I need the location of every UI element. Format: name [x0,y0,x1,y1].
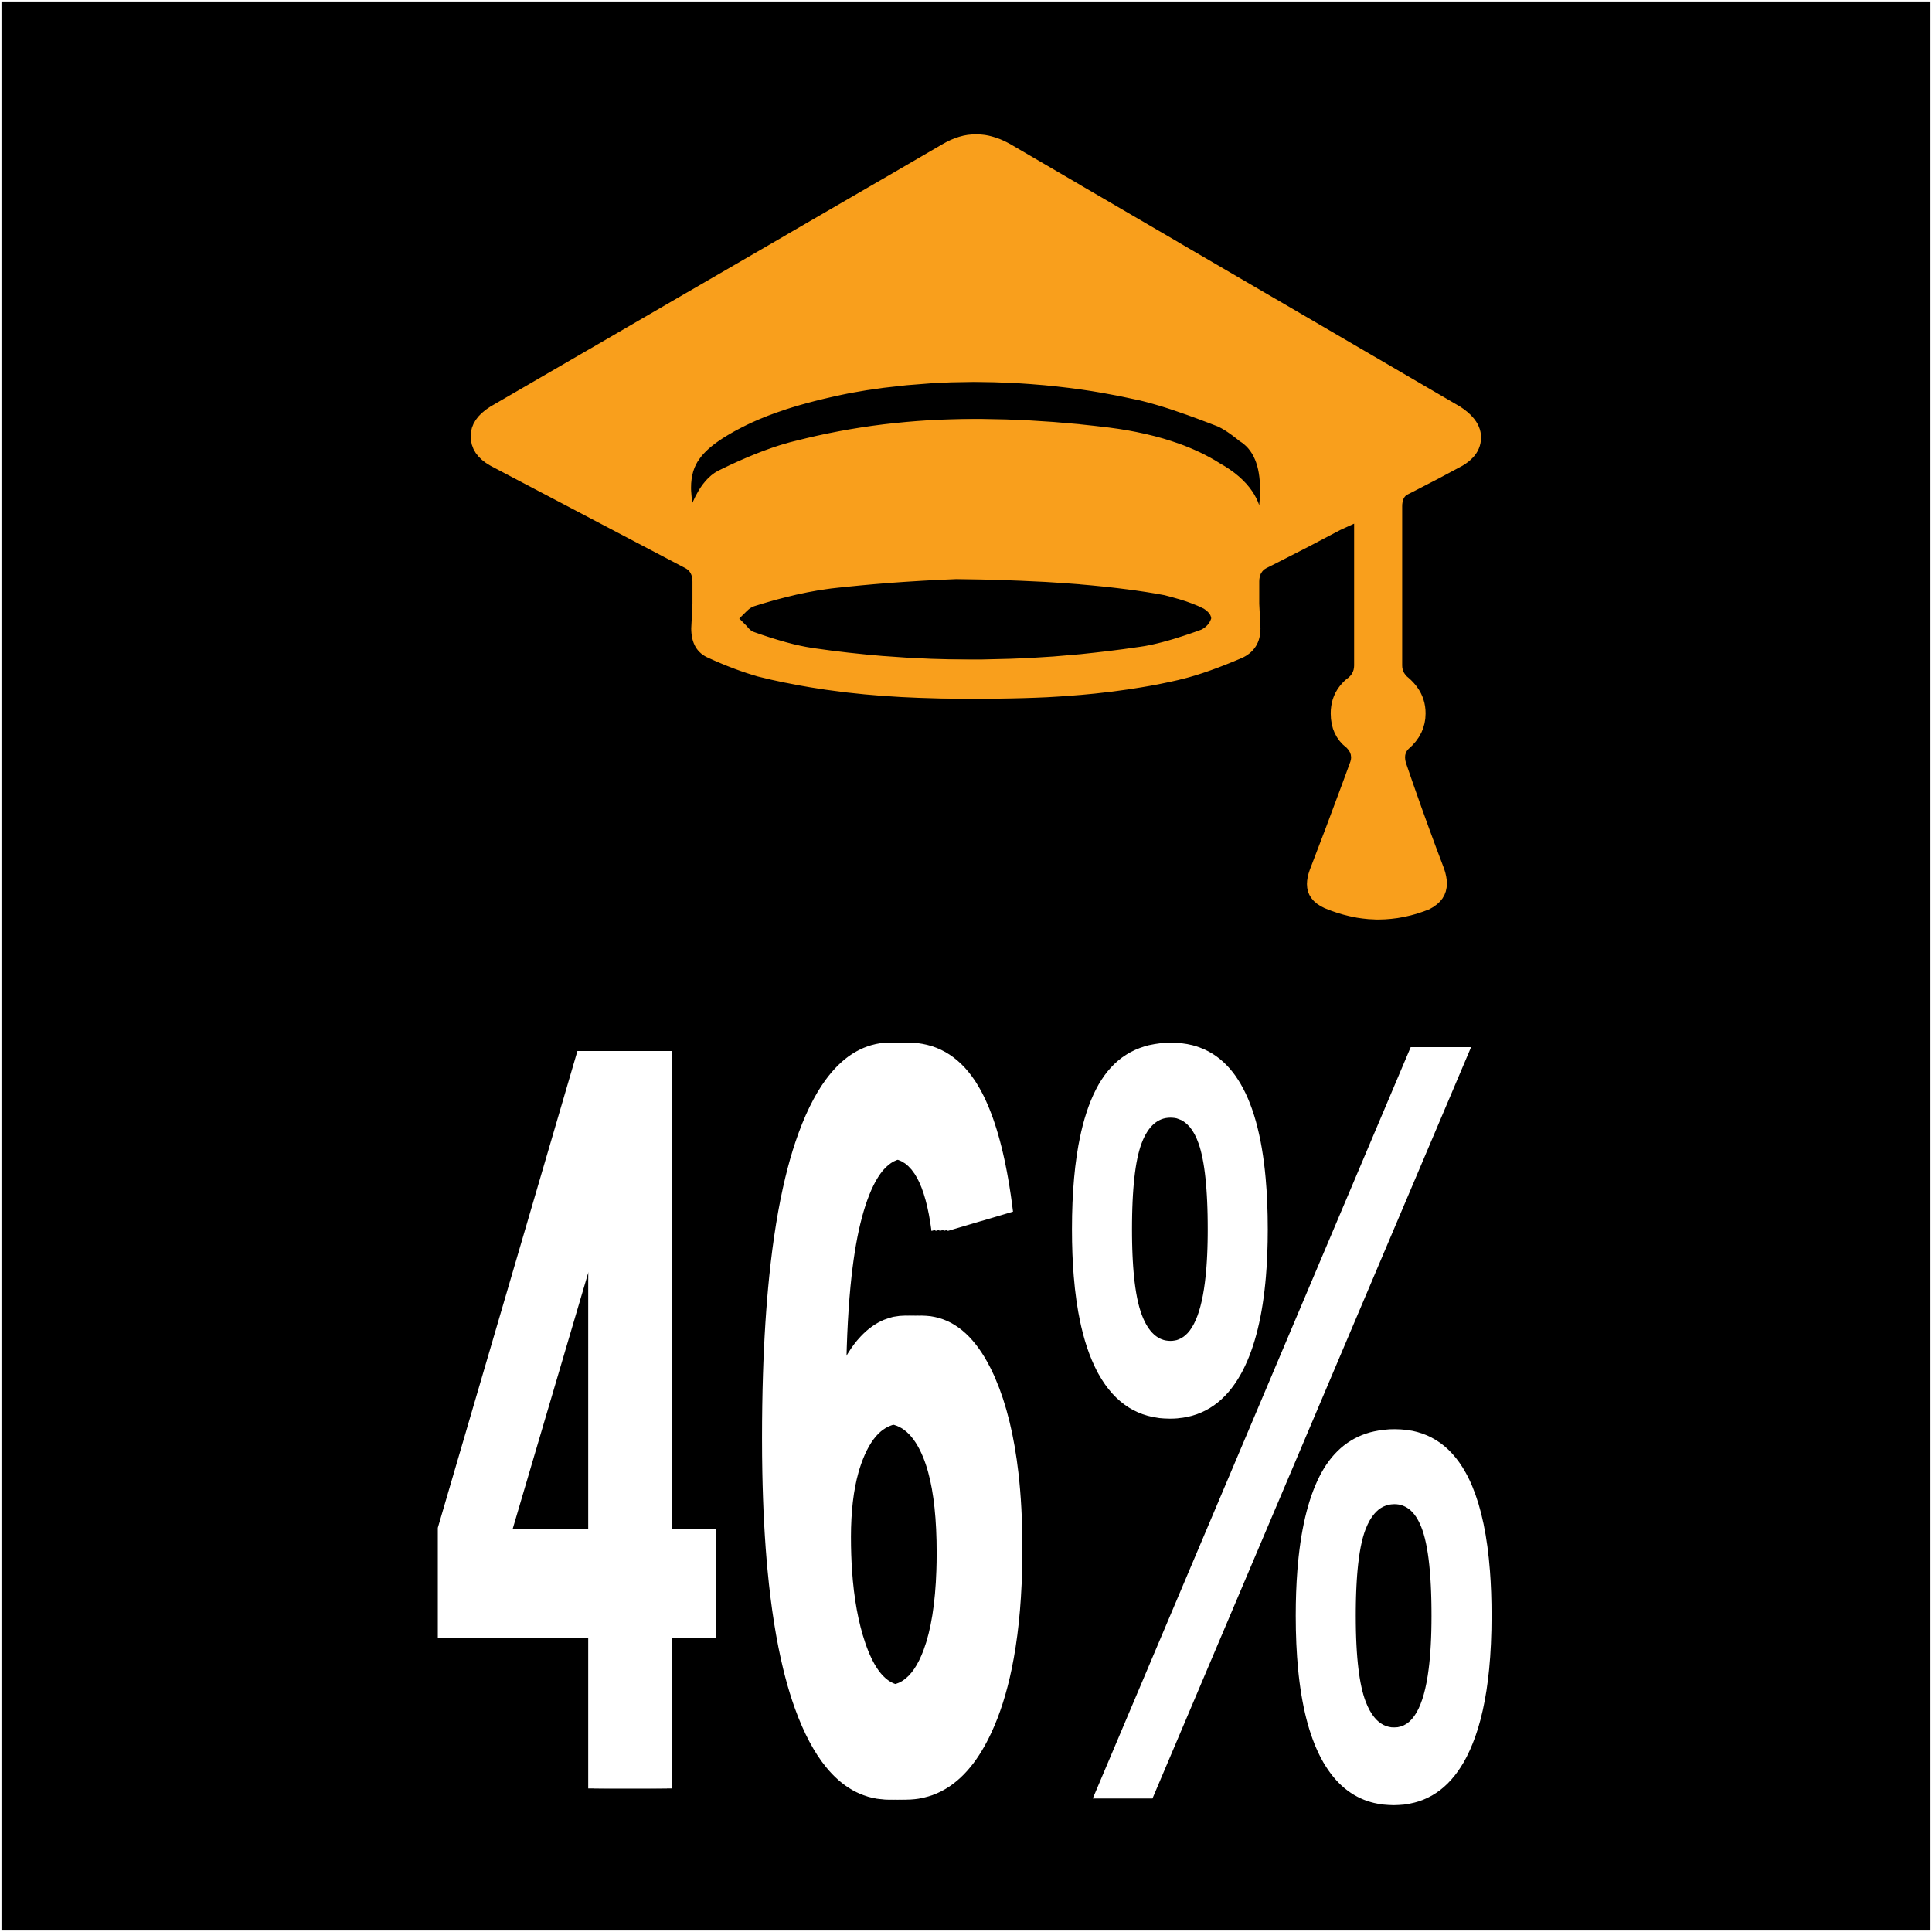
icon: graduation cap with tassel [471,134,1481,920]
